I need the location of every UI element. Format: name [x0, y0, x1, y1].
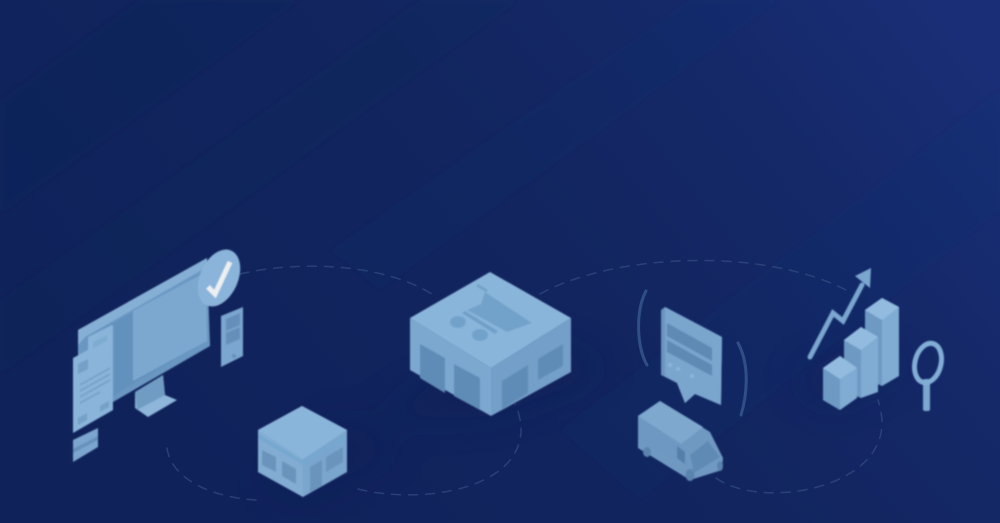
path: delivery to analytics	[716, 400, 882, 493]
check badge	[189, 243, 249, 313]
path: monitor to warehouse	[167, 448, 256, 500]
path: warehouse to store	[358, 404, 521, 495]
warehouse small building	[258, 406, 347, 497]
document sheet	[73, 325, 113, 433]
floor shadows	[260, 330, 910, 497]
dashed connection paths	[167, 260, 882, 500]
speech bubble	[661, 307, 722, 405]
payment card	[73, 428, 98, 462]
bar chart	[823, 298, 899, 410]
monitor	[78, 258, 210, 420]
store windows	[420, 344, 563, 410]
path: monitor to store	[240, 266, 435, 296]
magnifying glass	[911, 340, 945, 411]
analytics group	[810, 268, 945, 411]
arcs around delivery	[639, 291, 746, 415]
icon: shopping cart	[450, 285, 532, 341]
growth arrow	[810, 268, 871, 357]
computer tower	[221, 307, 243, 367]
monitor stand	[135, 375, 177, 417]
store large building	[410, 272, 571, 416]
path: store to delivery	[540, 260, 848, 294]
desktop computer group	[73, 243, 249, 462]
delivery van	[638, 401, 723, 481]
